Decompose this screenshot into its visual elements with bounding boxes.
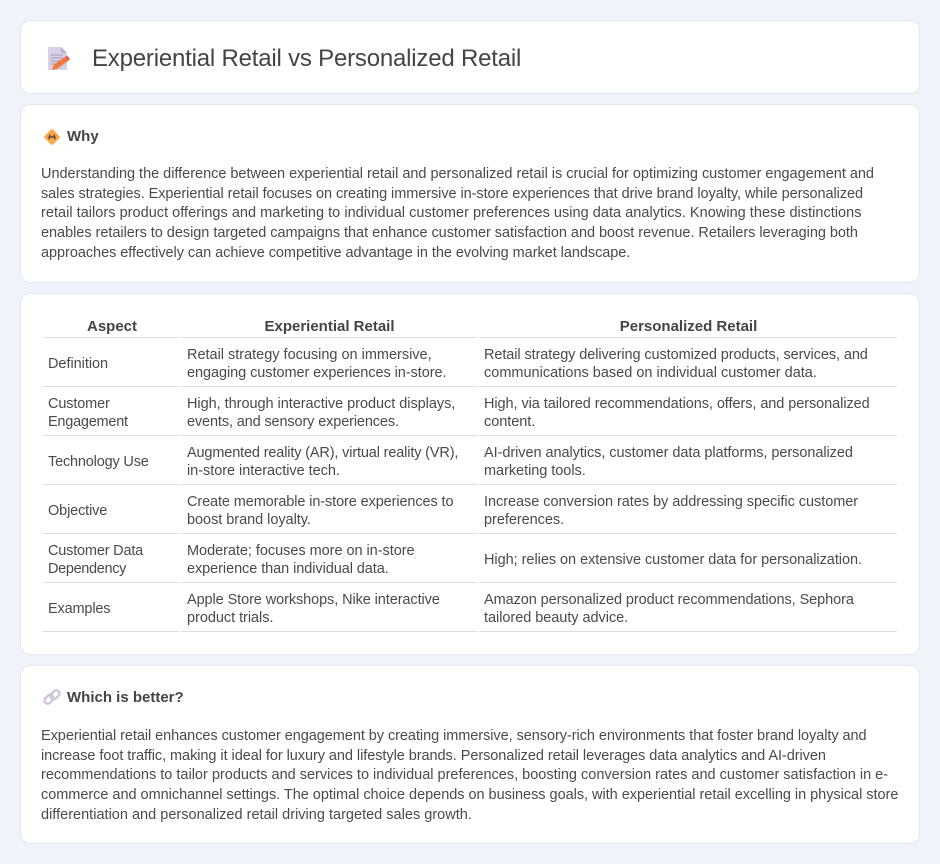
row: technology use: Augmented reality (AR), virtual reality (VR), (187, 445, 458, 461)
row: customer engagement: Engagement (48, 414, 128, 430)
table header (43, 318, 897, 338)
row: objective: Create memorable in-store experiences to (187, 494, 453, 510)
row: customer engagement: High, via tailored recommendations, offers, and personalized (484, 396, 870, 412)
text block: why (41, 166, 874, 261)
row: objective: boost brand loyalty. (187, 512, 311, 528)
heading: which is better: Which is better? (67, 689, 184, 706)
row: customer engagement: content. (484, 414, 535, 430)
text block: why: approaches effectively can achieve competitive advantage in the evolving market landscape. (41, 245, 630, 261)
text block: why: retail tailors product offerings and marketing to individual customer preferences using data analytics. Knowing these distinctions (41, 205, 862, 221)
panel: which is better (20, 665, 920, 844)
row: examples: product trials. (187, 610, 273, 626)
row: customer engagement: events, and sensory experiences. (187, 414, 399, 430)
row: examples: tailored beauty advice. (484, 610, 628, 626)
text block: which is better: Experiential retail enhances customer engagement by creating immersive, sensory-rich environments that foster brand loyalty and (41, 728, 867, 744)
row: objective: Increase conversion rates by addressing specific customer (484, 494, 858, 510)
icon: link (43, 689, 61, 705)
row: technology use (43, 445, 897, 485)
row: customer data dependency: Moderate; focuses more on in-store (187, 543, 415, 559)
panel: header (20, 20, 920, 94)
row: definition: Definition (48, 356, 108, 372)
text block: why: sales strategies. Experiential retail focuses on creating immersive in-store experiences that drive brand loyalty, while personalized (41, 186, 863, 202)
heading: why: Why (67, 128, 99, 145)
row: examples: Examples (48, 601, 110, 617)
text block: which is better: increase foot traffic, making it ideal for luxury and lifestyle brands. Personalized retail leverages data analytics and AI-driven (41, 748, 826, 764)
row: definition (43, 347, 897, 387)
title: Experiential Retail vs Personalized Retail (92, 45, 521, 72)
row: definition: Retail strategy delivering customized products, services, and (484, 347, 868, 363)
row: technology use: in-store interactive tech. (187, 463, 340, 479)
row: customer engagement: Customer (48, 396, 110, 412)
text block: which is better: commerce and omnichannel settings. The optimal choice depends on business goals, with experiential retail excelling in physical store (41, 787, 898, 803)
row: definition: communications based on individual customer data. (484, 365, 817, 381)
text block: why: Understanding the difference between experiential retail and personalized retail is crucial for optimizing customer engagement and (41, 166, 874, 182)
row: technology use: Technology Use (48, 454, 149, 470)
row: technology use: AI-driven analytics, customer data platforms, personalized (484, 445, 853, 461)
text block: which is better (41, 728, 898, 823)
row: customer engagement: High, through interactive product displays, (187, 396, 455, 412)
icon: document with pencil (48, 47, 70, 70)
row: examples: Apple Store workshops, Nike interactive (187, 592, 440, 608)
panel: why (20, 104, 920, 283)
row: objective (43, 494, 897, 534)
text block: why: enables retailers to design targeted campaigns that enhance customer satisfaction and boost revenue. Retailers leveraging both (41, 225, 858, 241)
row: customer data dependency: High; relies on extensive customer data for personalization. (484, 552, 862, 568)
icon: warning diamond (44, 129, 60, 145)
table header: Personalized Retail (620, 318, 757, 335)
panel: comparison table (20, 293, 920, 655)
row: definition: Retail strategy focusing on immersive, (187, 347, 432, 363)
row: customer engagement (43, 396, 897, 436)
row: definition: engaging customer experiences in-store. (187, 365, 446, 381)
row: customer data dependency: Dependency (48, 561, 126, 577)
table header: Aspect (87, 318, 137, 335)
row: customer data dependency: experience than individual data. (187, 561, 389, 577)
row: customer data dependency: Customer Data (48, 543, 143, 559)
row: examples (43, 592, 897, 632)
table header: Experiential Retail (264, 318, 395, 335)
row: objective: preferences. (484, 512, 564, 528)
text block: which is better: differentiation and personalized retail driving targeted sales growth. (41, 807, 472, 823)
row: technology use: marketing tools. (484, 463, 586, 479)
row: examples: Amazon personalized product recommendations, Sephora (484, 592, 854, 608)
text block: which is better: recommendations to tailor products and services to individual preferences, boosting conversion rates and customer satisfaction in e- (41, 767, 888, 783)
row: customer data dependency (43, 543, 897, 583)
row: objective: Objective (48, 503, 107, 519)
